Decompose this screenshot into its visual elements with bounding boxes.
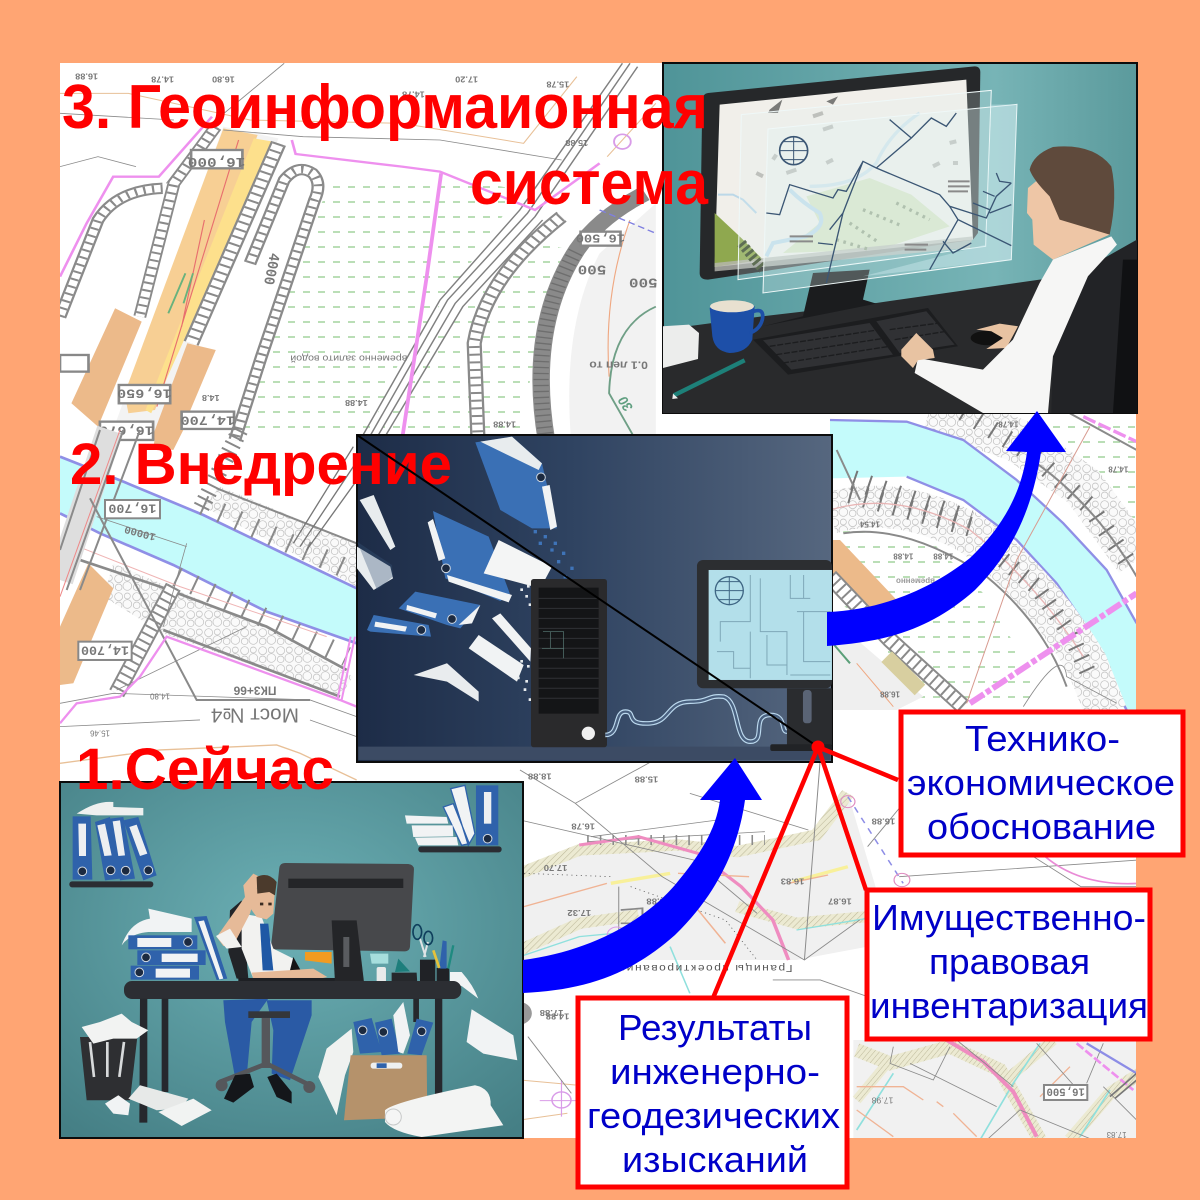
- icon: coffee mug: [710, 300, 763, 353]
- icon: server tower: [531, 579, 607, 747]
- callout: property inventory: Имущественно-: [872, 897, 1146, 938]
- callout: survey results: инженерно-: [610, 1051, 820, 1092]
- callout: feasibility study: [901, 712, 1183, 855]
- title: step 3: [62, 73, 708, 218]
- map: north-west embankments: 14.88: [493, 420, 516, 429]
- icon: flying folders and papers: [357, 437, 557, 702]
- icon: desk with items: [124, 925, 478, 1123]
- map: central river and bridge: 15.46: [89, 728, 110, 737]
- map: central river and bridge: [60, 430, 367, 780]
- map: central river and bridge: 14,700: [81, 641, 129, 656]
- arrow: step 2 to step 3: [827, 411, 1066, 646]
- map: south-east corner: 16,500: [1046, 1085, 1085, 1097]
- map: north-east river bend: временно: [896, 576, 935, 585]
- icon: waste bin with paper: [80, 1014, 212, 1126]
- icon: right shelf with folders: [405, 785, 502, 852]
- map: north-east river bend: 14.54: [859, 520, 880, 529]
- map: north-west embankments: 0.1 леп то: [589, 359, 648, 370]
- map: central river and bridge: Мост №4: [211, 703, 299, 726]
- icon: computer monitor with digital plan: [697, 560, 832, 751]
- map: south-east project boundary area: 15.88: [634, 775, 658, 784]
- icon: translucent GIS layers: [738, 90, 1017, 293]
- map: north-west embankments: 30: [614, 394, 636, 413]
- map: north-west embankments: 16,650: [117, 385, 172, 400]
- callout: property inventory: инвентаризация: [870, 985, 1148, 1026]
- map: north-west embankments: 14.78: [151, 75, 174, 84]
- map: south-east project boundary area: Границы проектирования: [619, 962, 793, 973]
- map: north-west embankments: 14.8: [202, 393, 220, 402]
- icon: monitor: [700, 66, 980, 280]
- map: south-east project boundary area: 17.88: [540, 1008, 563, 1017]
- map: north-west embankments: временно залито водой: [290, 353, 407, 363]
- map: central river and bridge: 16,700: [108, 500, 156, 515]
- callout: survey results: Результаты: [618, 1007, 812, 1048]
- icon: monitor stand: [763, 270, 876, 326]
- map: north-west embankments: 14,700: [180, 412, 235, 427]
- map: north-east river bend: [830, 410, 1137, 713]
- callout: property inventory: правовая: [929, 941, 1090, 982]
- map: north-west embankments: 16.80: [212, 75, 235, 84]
- map: north-east river bend: 14.78: [1108, 465, 1128, 474]
- map: north-west embankments: 500: [629, 274, 658, 290]
- map: south-east corner: [853, 1040, 1140, 1140]
- icon: man at computer: [901, 146, 1137, 413]
- title: step 3: система: [470, 149, 708, 218]
- icon: paper block and pencil: [663, 325, 745, 399]
- connector lines: [713, 740, 898, 998]
- map: north-east river bend: 14.88: [893, 551, 913, 560]
- map: north-east river bend: 14.78: [998, 420, 1018, 429]
- title: step 1: 1.Сейчас: [76, 737, 334, 802]
- callout: feasibility study: обоснование: [927, 806, 1156, 847]
- map: north-west embankments: 500: [578, 261, 606, 277]
- image: digitisation of paper archive: [357, 435, 832, 762]
- icon: worried worker: [216, 874, 327, 1104]
- icon: disintegrating pixels: [534, 530, 574, 578]
- map: north-west embankments: 17.20: [455, 75, 478, 84]
- map: north-west embankments: 16.88: [75, 71, 98, 81]
- map: south-east project boundary area: 18.88: [646, 896, 670, 906]
- map: north-west embankments: 4000: [259, 252, 282, 286]
- map: north-west embankments: 16,670: [99, 422, 154, 437]
- map: south-east project boundary area: 16.88: [871, 817, 895, 826]
- image: present-day overloaded office worker: [60, 782, 523, 1138]
- map: south-east project boundary area: 18.88: [528, 772, 552, 781]
- map: central river and bridge: 14.80: [149, 691, 170, 700]
- map: south-east project boundary area: 14.88: [546, 1011, 569, 1021]
- map: north-west embankments: 15.88: [565, 138, 588, 147]
- map: south-east project boundary area: 16.83: [781, 876, 804, 886]
- callout: property inventory: [867, 890, 1150, 1039]
- map: south-east project boundary area: 16.87: [828, 896, 852, 906]
- map: central river and bridge: 10000: [123, 522, 157, 542]
- image: GIS workstation: [663, 63, 1137, 413]
- icon: keyboard: [753, 308, 958, 375]
- callout: survey results: изысканий: [622, 1139, 808, 1180]
- icon: cardboard box with folders: [318, 1002, 517, 1137]
- map: north-west embankments: 14.88: [345, 398, 368, 407]
- map: north-west embankments: 16,500: [576, 231, 625, 245]
- map: north-east river bend: 16.88: [879, 690, 900, 699]
- map: south-east project boundary area: [504, 760, 1139, 1120]
- map: north-west embankments: 16,000: [188, 153, 245, 169]
- icon: computer monitor: [271, 863, 414, 982]
- map: central river and bridge: ПК3+66: [233, 684, 276, 698]
- icon: data stream: [605, 696, 787, 742]
- icon: dark desk: [663, 270, 1137, 413]
- map: south-east corner: 17.98: [871, 1095, 893, 1105]
- map: north-west embankments: 14.78: [402, 90, 425, 99]
- map: north-west embankments: 15.78: [546, 80, 569, 89]
- map: south-east project boundary area: 16.78: [571, 822, 595, 831]
- icon: shelf with folders: [69, 802, 157, 887]
- arrow: step 1 to step 2: [523, 758, 762, 993]
- map: north-east river bend: 14.88: [933, 551, 953, 560]
- map: north-west embankments: [60, 63, 658, 440]
- callout: feasibility study: экономическое: [907, 762, 1175, 803]
- map: south-east project boundary area: 17.70: [544, 863, 567, 872]
- title: step 2: 2. Внедрение: [70, 432, 452, 497]
- icon: document stacks: [122, 909, 227, 980]
- map: south-east corner: 17.83: [1106, 1130, 1127, 1139]
- callout: survey results: геодезических: [587, 1095, 840, 1136]
- callout: feasibility study: Технико-: [965, 718, 1120, 759]
- map: south-east project boundary area: 17.32: [567, 908, 591, 917]
- callout: survey results: [578, 998, 847, 1187]
- title: step 3: 3. Геоинформаионная: [62, 73, 708, 142]
